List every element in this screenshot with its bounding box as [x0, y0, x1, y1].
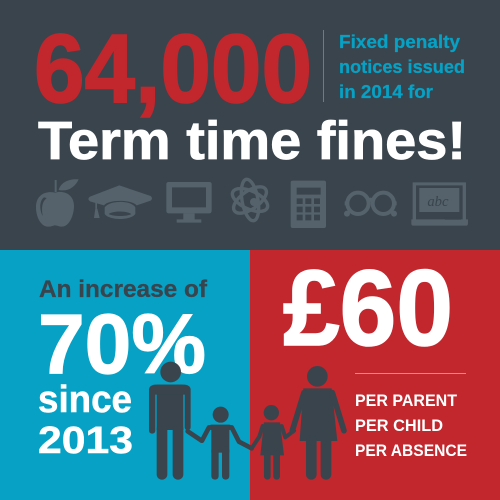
stat: 70%: 70% [38, 297, 206, 391]
panel: red cost [250, 250, 500, 500]
text: fixed penalty notices [339, 32, 465, 102]
text: since 2013: since [38, 379, 132, 421]
text: an increase of: An increase of [39, 276, 208, 303]
icon: apple [36, 179, 79, 227]
icon: graduation cap [88, 185, 152, 219]
panel: blue increase [0, 250, 250, 500]
text: per parent, child, absence: PER PARENT [355, 392, 457, 410]
text: fixed penalty notices: in 2014 for [339, 82, 433, 102]
figure: boy [202, 407, 252, 480]
icon: calculator [291, 181, 326, 228]
family figures [149, 362, 344, 480]
figure: mother [292, 366, 344, 480]
text: fixed penalty notices: Fixed penalty [339, 32, 460, 52]
text: per parent, child, absence: PER ABSENCE [355, 442, 467, 460]
icon: laptop with abc: abc [427, 194, 449, 210]
figure: father [149, 362, 202, 480]
panel: dark header [0, 0, 500, 250]
text: per parent, child, absence [355, 392, 467, 460]
text: since 2013 [38, 379, 133, 462]
text: per parent, child, absence: PER CHILD [355, 417, 443, 435]
icon: atom [229, 178, 271, 222]
stat: £60: £60 [283, 247, 453, 368]
icon: laptop with abc [411, 182, 468, 226]
headline number: 64,000 [34, 14, 312, 123]
icon: computer monitor [166, 182, 212, 223]
text: fixed penalty notices: notices issued [339, 57, 465, 77]
figure: girl [252, 405, 294, 480]
icon row [36, 178, 468, 228]
title: Term time fines! [38, 111, 466, 171]
icon: glasses [344, 193, 397, 217]
text: since 2013: 2013 [38, 420, 133, 462]
